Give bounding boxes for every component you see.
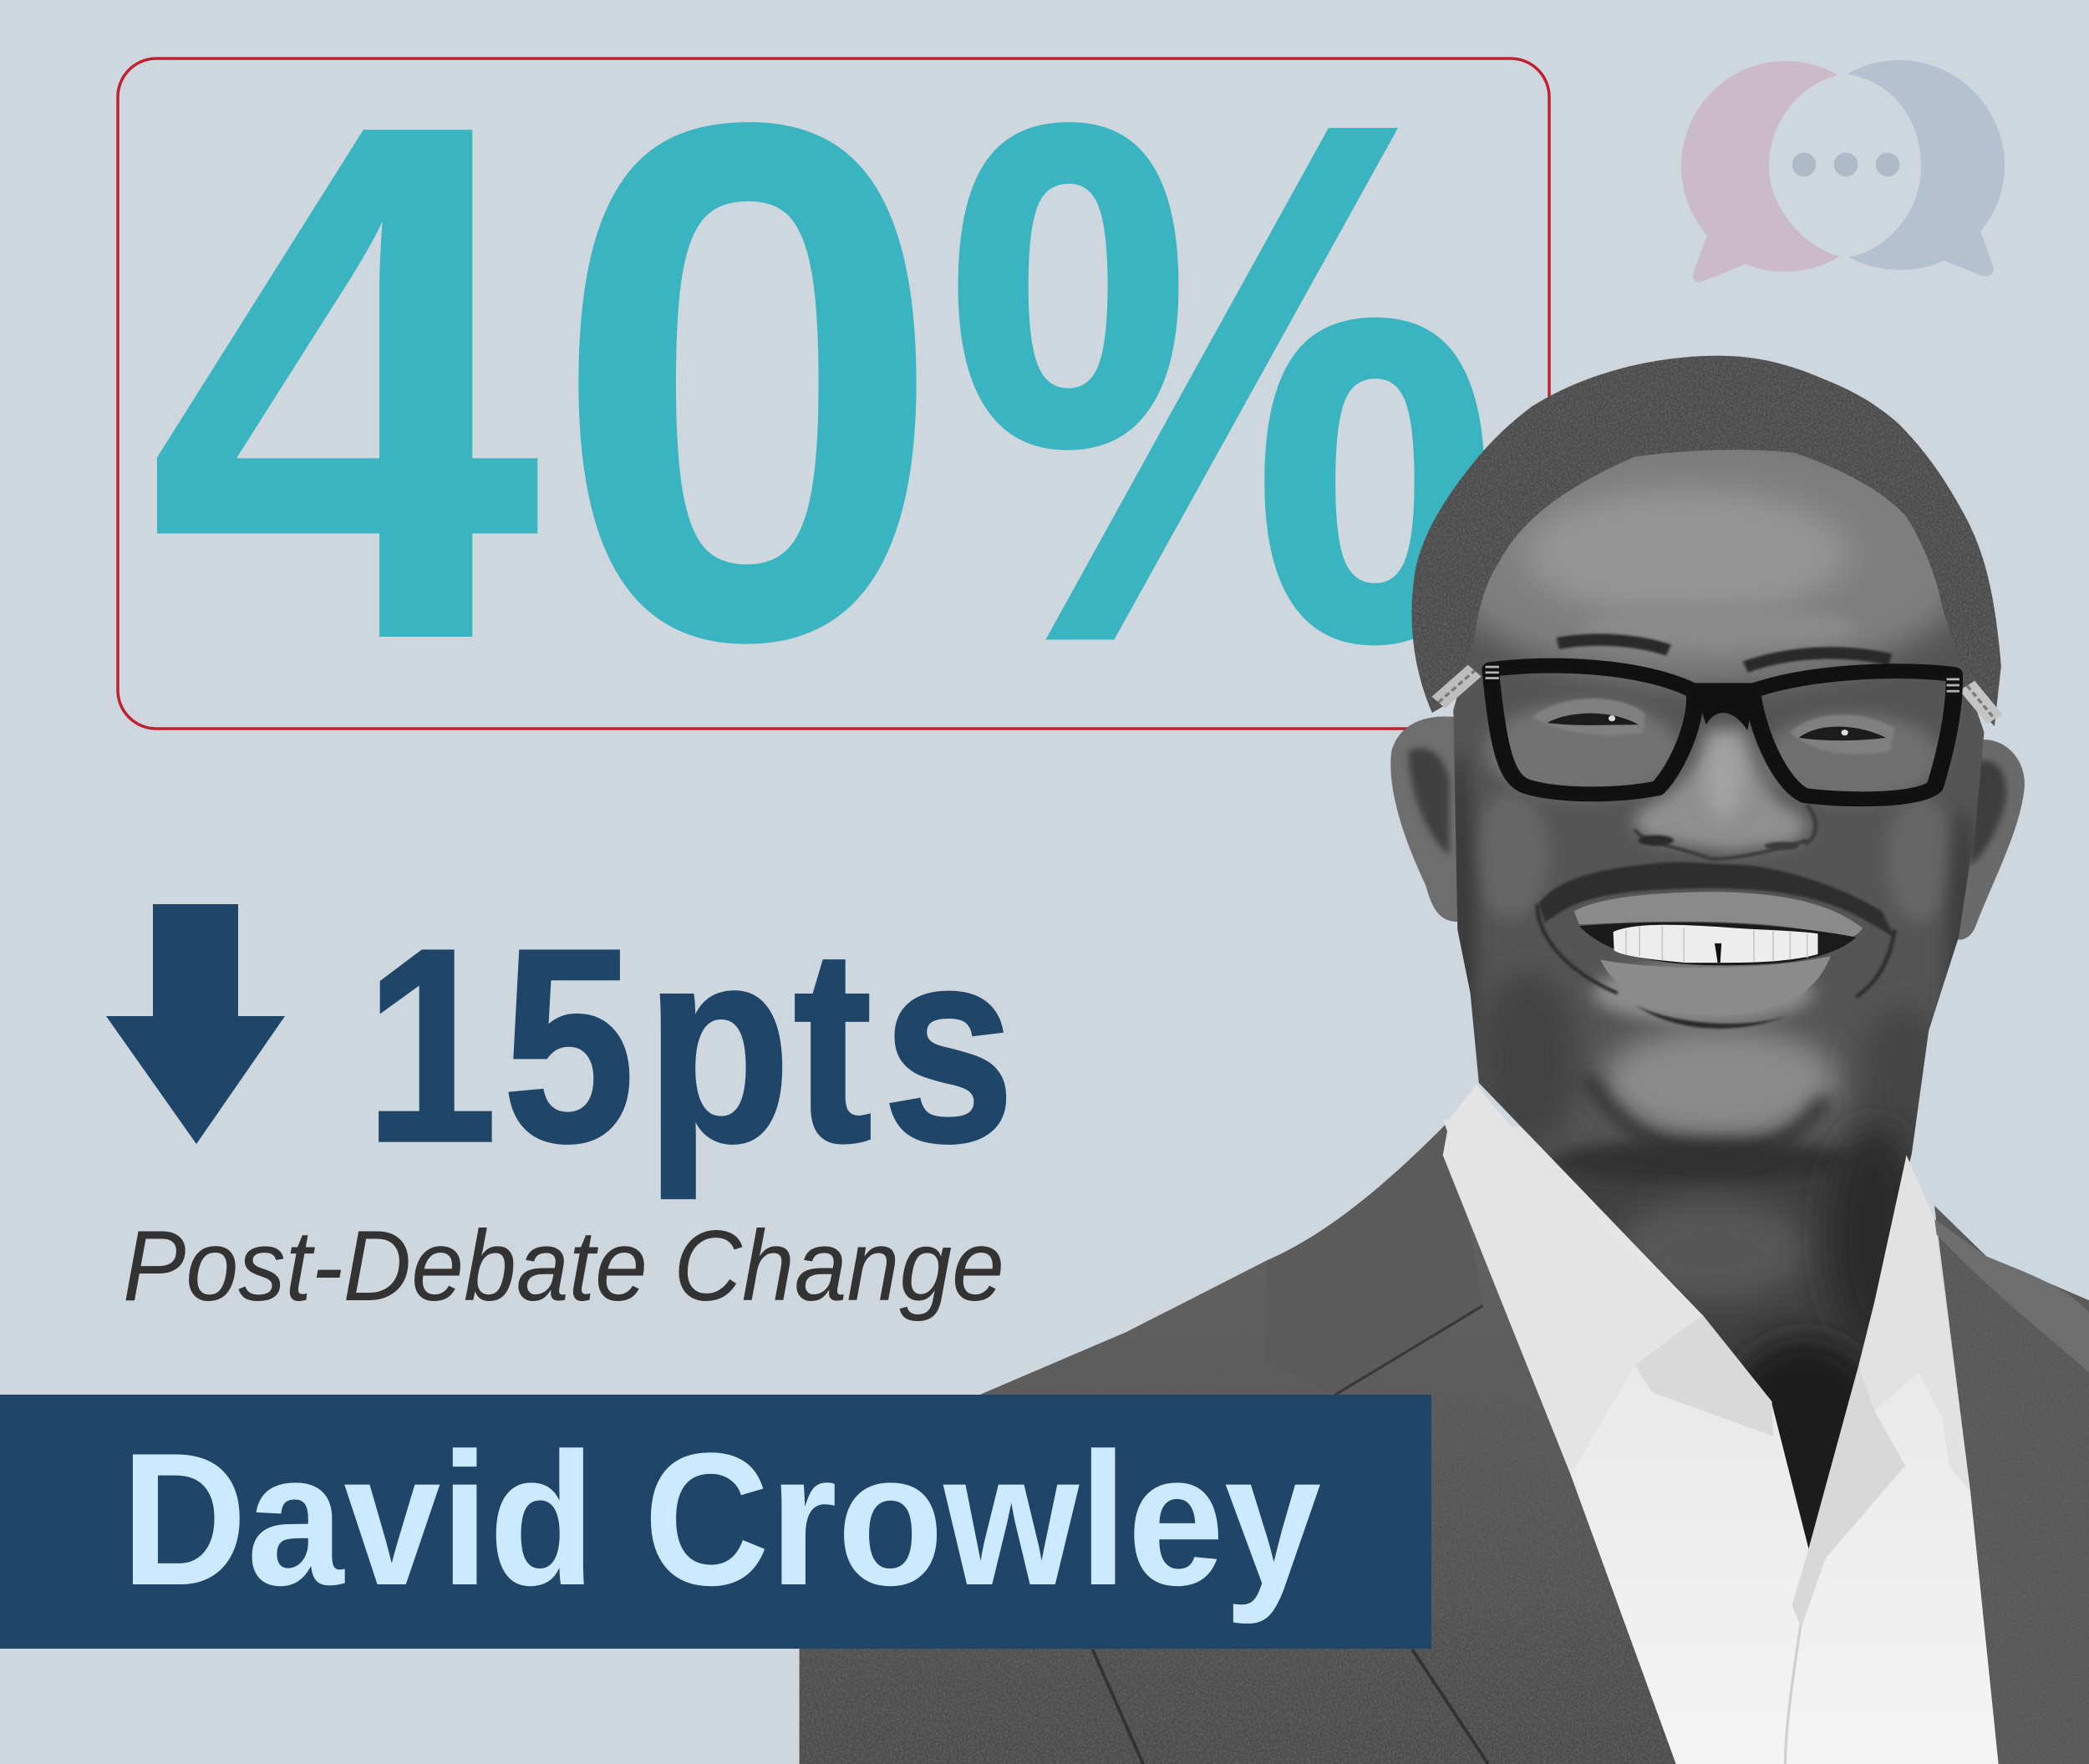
- caption: Post-Debate Change: Post-Debate Change: [123, 1210, 1004, 1322]
- icon: down arrow: [106, 904, 285, 1144]
- smile creases: [1538, 904, 1894, 997]
- icon: overlapping speech bubbles: [1681, 60, 2005, 282]
- skin shading: [1421, 430, 1997, 1594]
- big stat: 40%: [146, 0, 1498, 793]
- eyes: [1532, 699, 1894, 755]
- lips: [1574, 892, 1863, 938]
- skin base: [1453, 450, 1984, 1556]
- stat frame: [118, 58, 1549, 729]
- shirt collars: [1443, 1085, 1970, 1628]
- name banner: [0, 1395, 1431, 1649]
- neck shading: [1554, 1161, 1875, 1548]
- portrait: man in glasses and suit: [800, 356, 2089, 1764]
- left ear: [1390, 716, 1460, 922]
- eyebrows: [1558, 640, 1890, 667]
- change value: 15pts: 15pts: [365, 892, 1014, 1201]
- hair: [1412, 356, 2001, 726]
- moustache: [1538, 862, 1894, 938]
- nose: [1634, 729, 1816, 859]
- face: [1390, 430, 2025, 1594]
- mouth and teeth: [1579, 923, 1856, 965]
- right ear: [1956, 740, 2025, 940]
- glasses: [1438, 666, 1995, 799]
- jacket and shirt: [800, 356, 2089, 1764]
- name: David Crowley: [121, 1413, 1321, 1624]
